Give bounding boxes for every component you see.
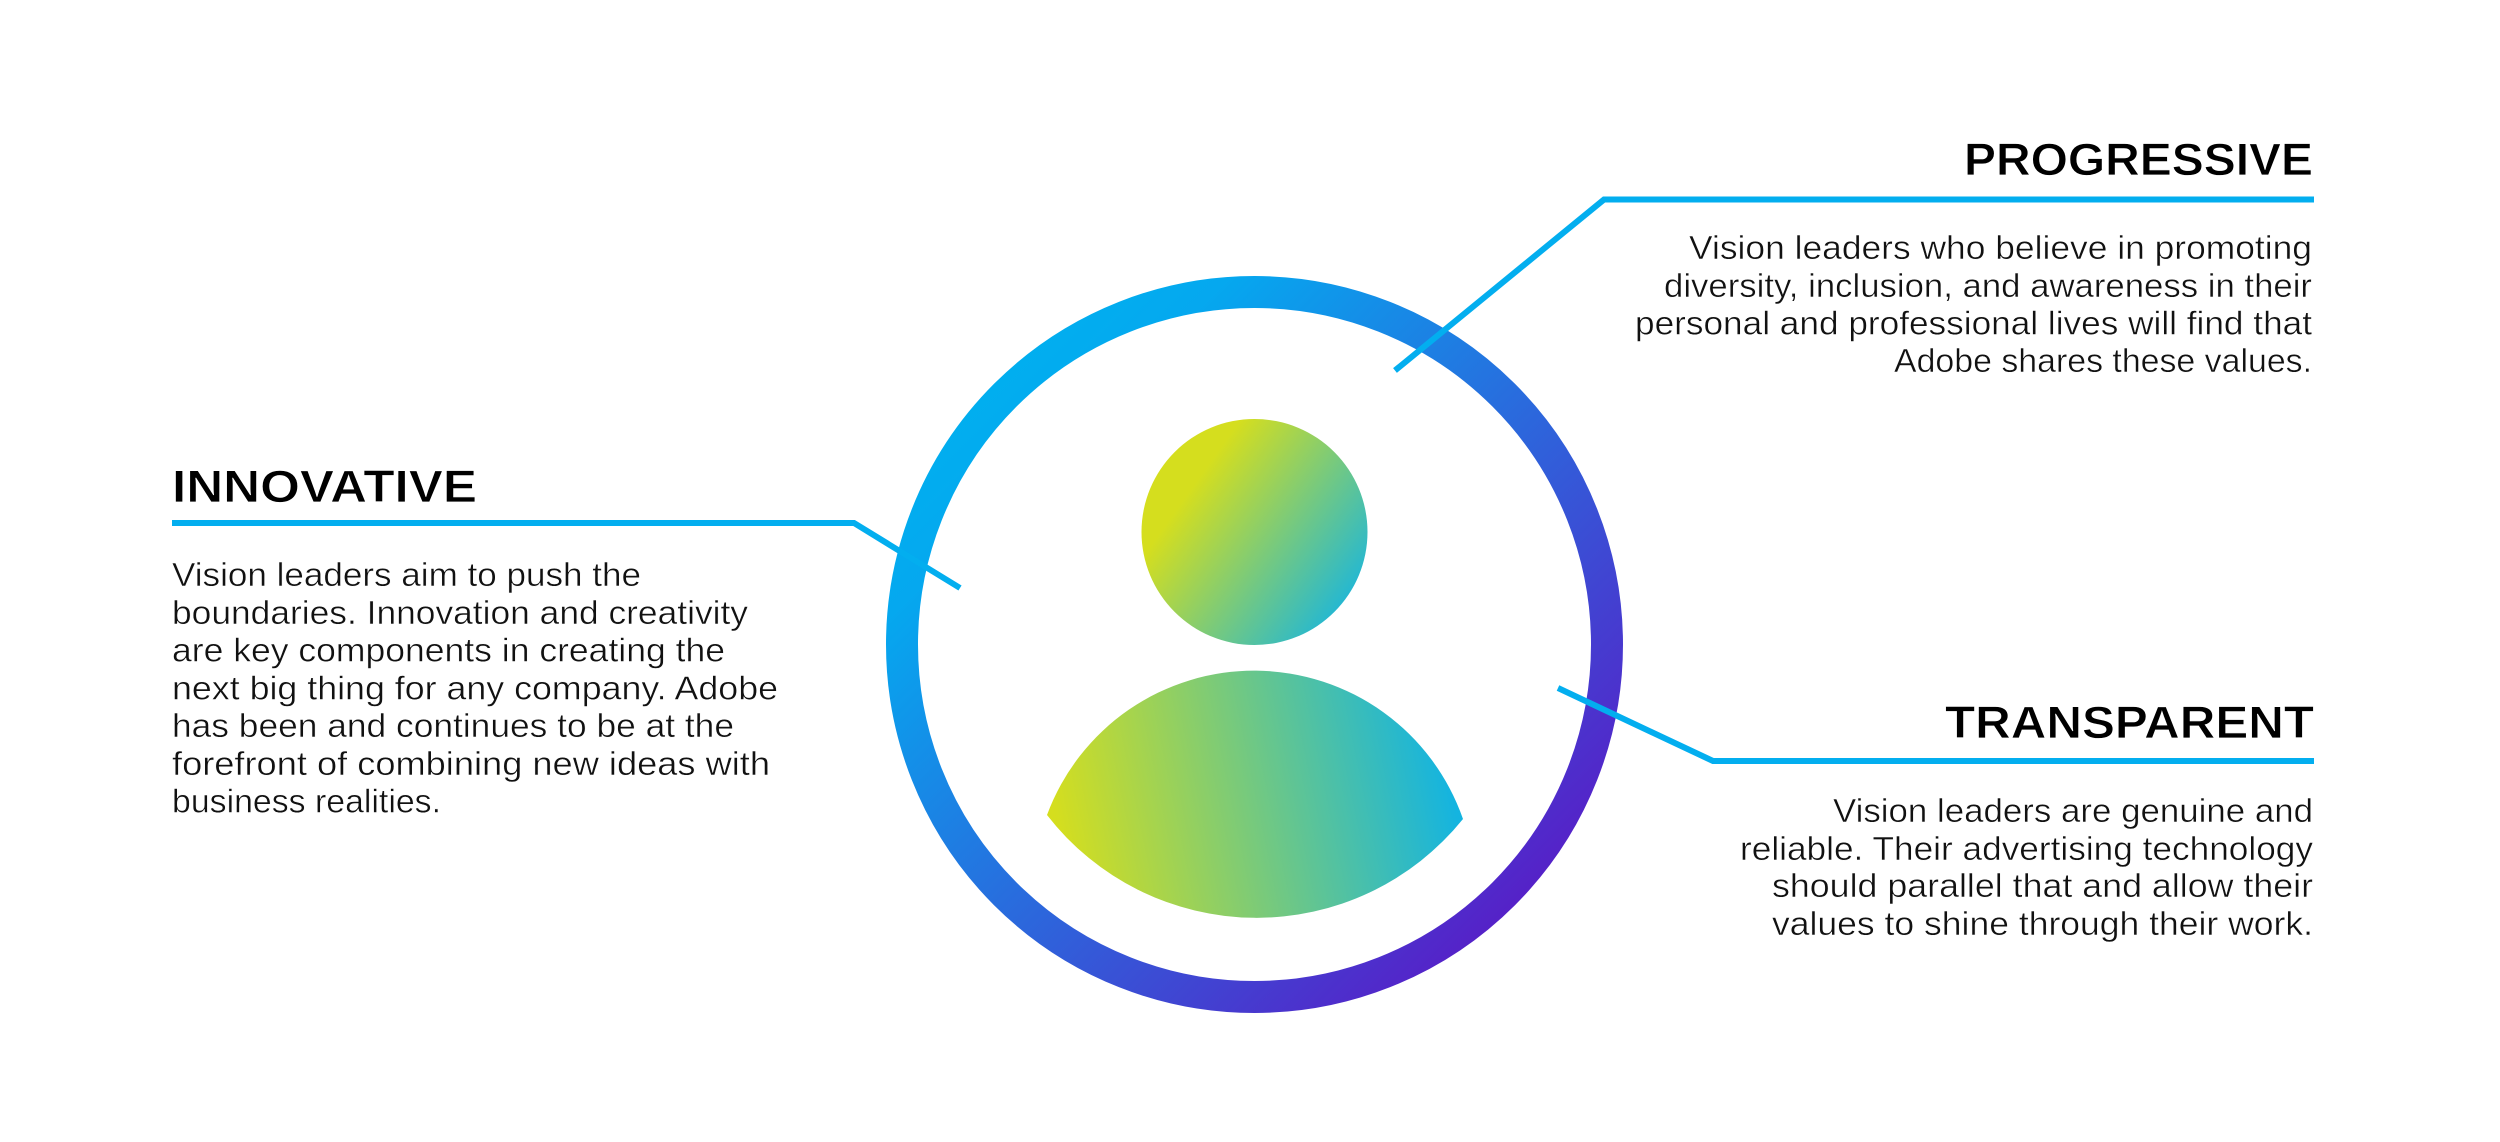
text block: transparent: values to shine through their work.	[1772, 905, 2313, 942]
connector line: innovative	[172, 523, 960, 588]
text block: innovative: has been and continues to be at the	[172, 707, 734, 744]
text block: innovative: business realities.	[172, 782, 441, 820]
text block: innovative: next big thing for any company. Adobe	[172, 670, 778, 706]
panel: progressive	[1395, 134, 2314, 379]
icon: person head	[1142, 419, 1368, 645]
text block: transparent	[1740, 792, 2314, 942]
text block: progressive: Vision leaders who believe in promoting	[1689, 229, 2312, 266]
text block: innovative: boundaries. Innovation and creativity	[172, 594, 749, 631]
icon: person	[1047, 419, 1463, 918]
text block: innovative: are key components in creating the	[172, 632, 725, 668]
panel: transparent	[1558, 688, 2314, 942]
text block: progressive: Adobe shares these values.	[1894, 342, 2312, 379]
heading: transparent: TRANSPARENT	[1945, 697, 2314, 748]
panel: innovative	[172, 461, 960, 820]
text block: transparent: reliable. Their advertising technology	[1740, 830, 2314, 867]
heading: progressive: PROGRESSIVE	[1964, 134, 2313, 185]
connector line: transparent	[1558, 688, 2314, 761]
heading: innovative: INNOVATIVE	[172, 461, 477, 512]
text block: innovative: Vision leaders aim to push the	[172, 556, 641, 593]
icon: person body	[1047, 671, 1463, 918]
text block: innovative: forefront of combining new ideas with	[172, 745, 770, 782]
text block: progressive: personal and professional lives will find that	[1635, 304, 2312, 342]
connector line: progressive	[1395, 200, 2314, 370]
text block: progressive: diversity, inclusion, and awareness in their	[1664, 267, 2312, 304]
text block: transparent: should parallel that and allow their	[1772, 867, 2313, 904]
text block: transparent: Vision leaders are genuine and	[1833, 792, 2313, 829]
text block: innovative	[172, 556, 778, 820]
ring: outer circle	[902, 292, 1607, 997]
text block: progressive	[1635, 229, 2312, 379]
